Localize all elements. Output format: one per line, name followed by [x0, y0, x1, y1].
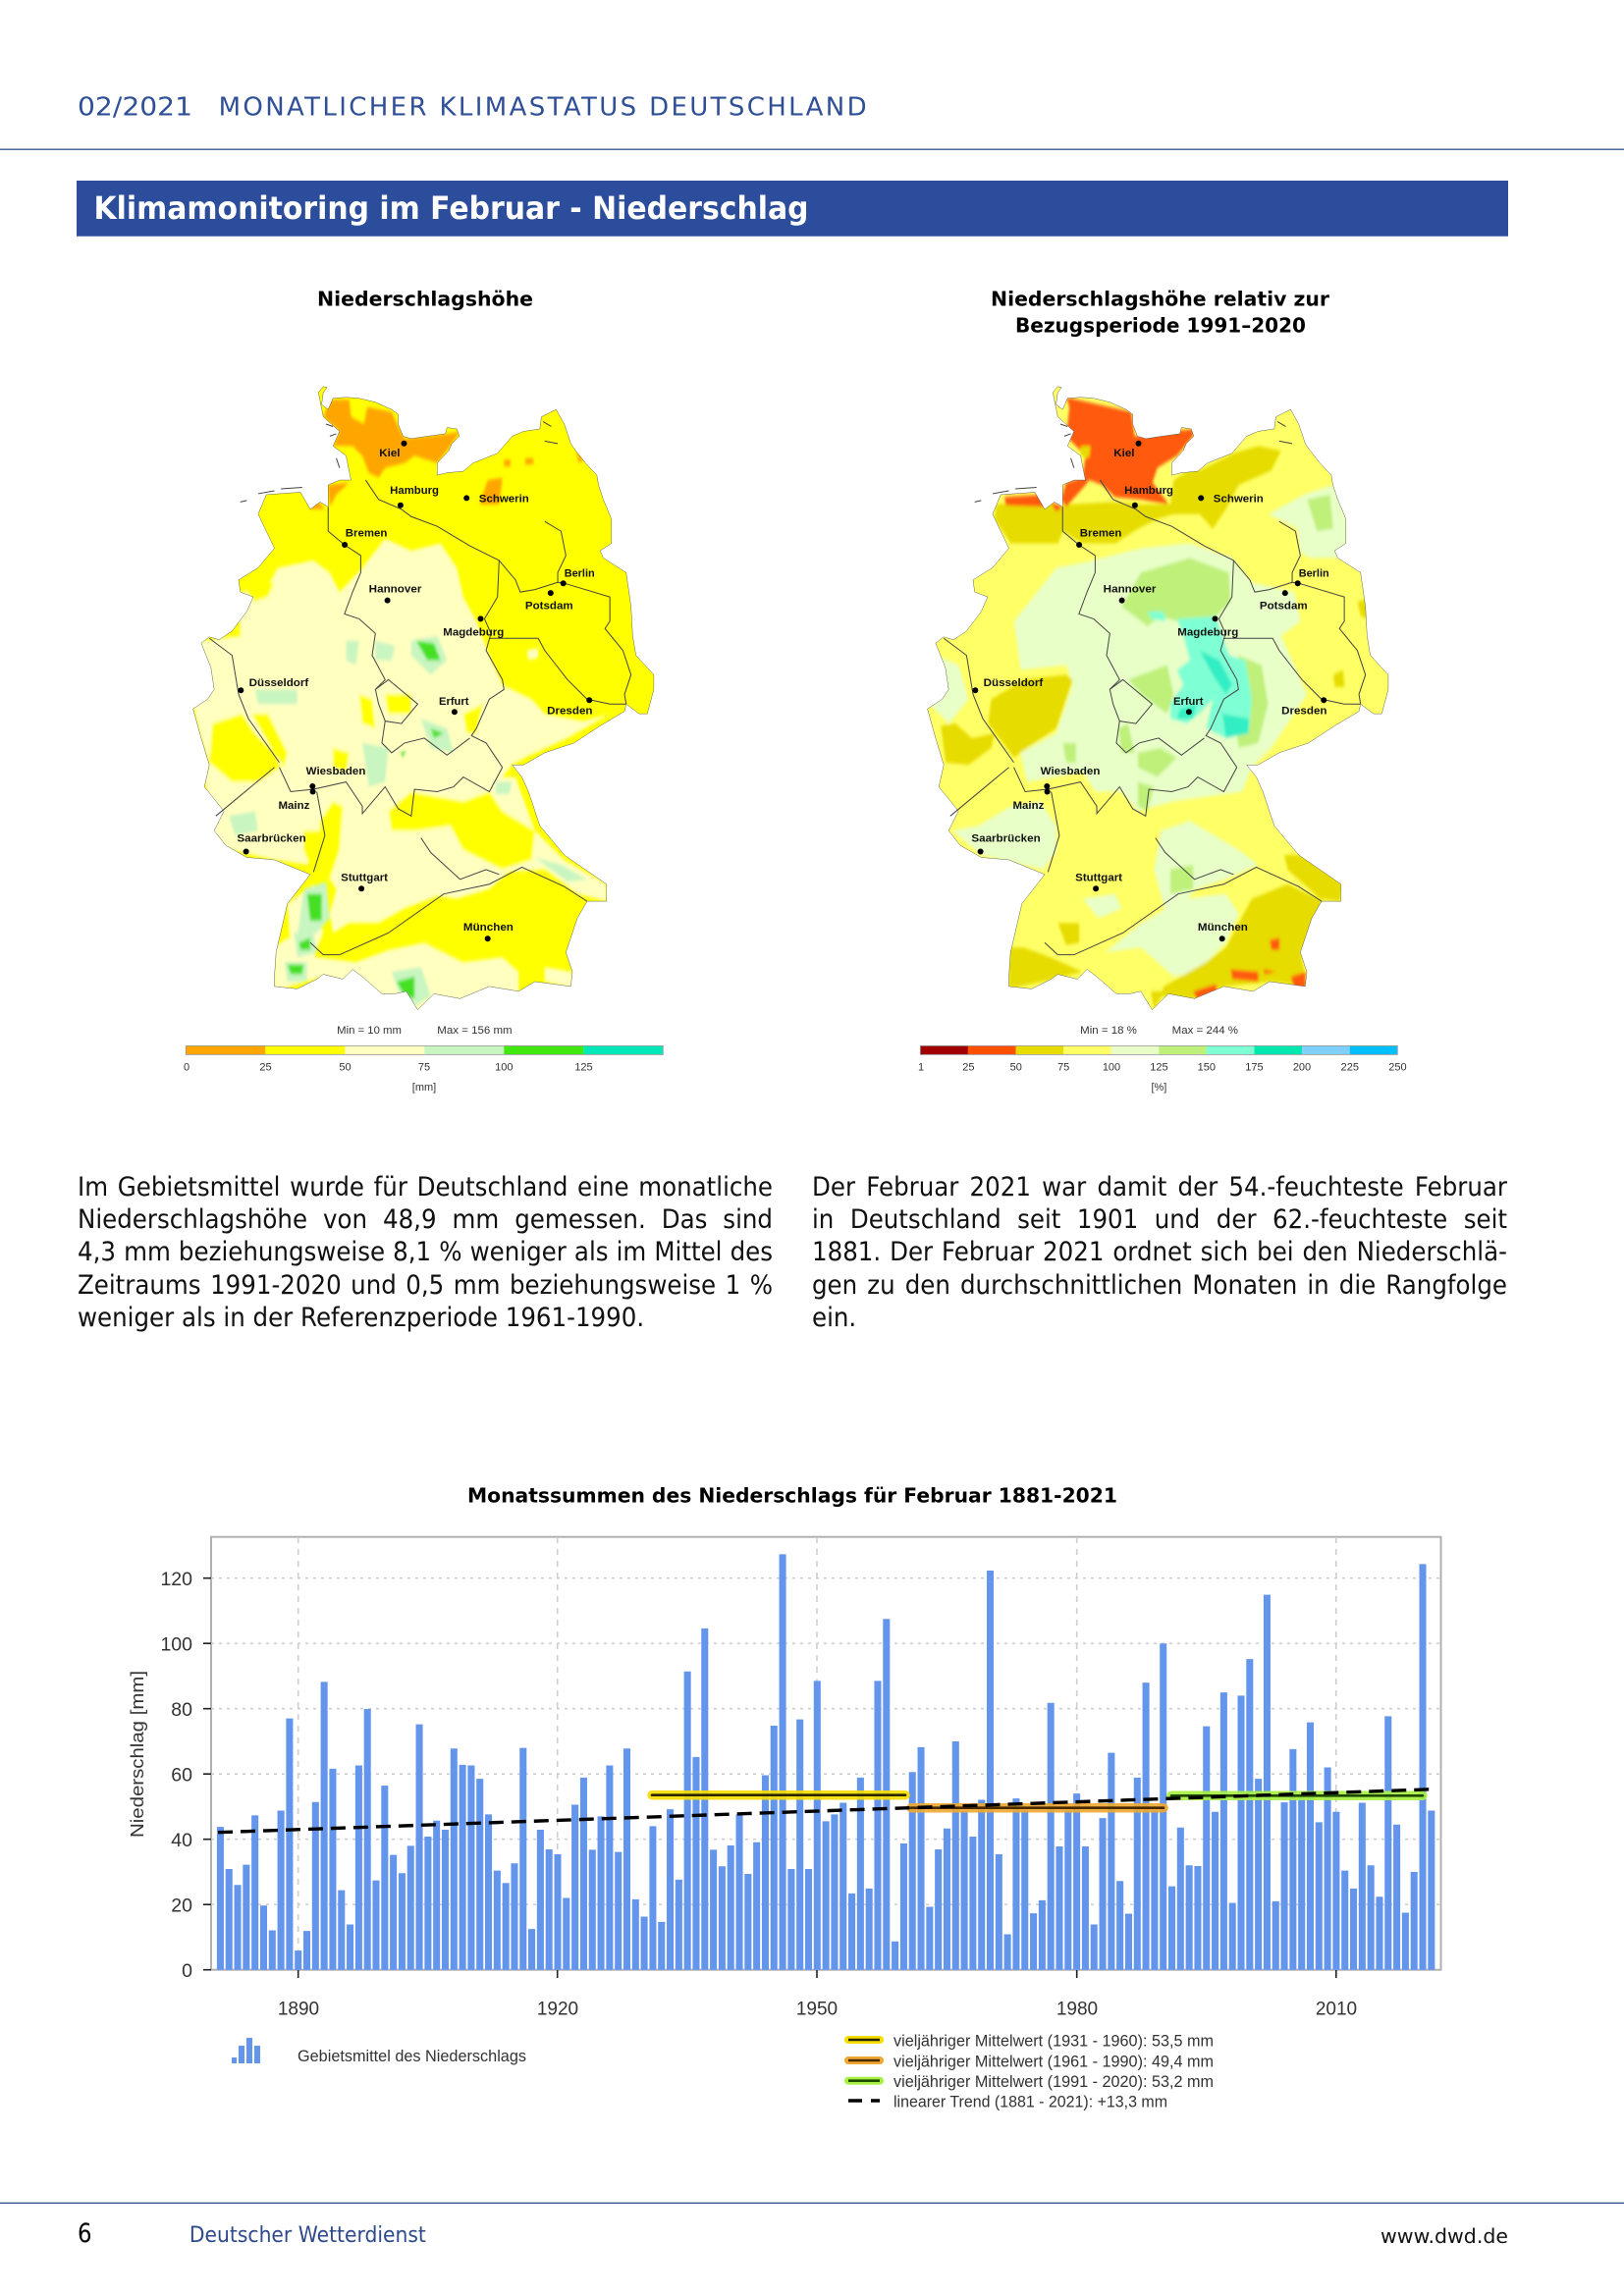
city labels: Saarbrücken	[971, 833, 1041, 845]
city labels: Kiel	[379, 448, 401, 459]
colour legend: percent: 100	[1103, 1062, 1120, 1074]
colour legend: mm: 75	[418, 1062, 430, 1074]
legend: mean lines and trend: vieljähriger Mittelwert (1931 - 1960): 53,5 mm	[893, 2032, 1214, 2050]
y axis: 100	[160, 1633, 192, 1655]
y axis: 0	[182, 1960, 192, 1982]
city labels: Bremen	[1080, 528, 1122, 540]
text block: left column	[78, 1172, 773, 1333]
colour legend: mm: 50	[339, 1062, 352, 1074]
heading: bar chart: Monatssummen des Niederschlags für Februar 1881-2021	[467, 1484, 1117, 1508]
colour legend: percent: [%]	[1151, 1082, 1166, 1094]
legend: area mean bars: Gebietsmittel des Niederschlags	[298, 2048, 526, 2065]
colour legend: percent: 250	[1388, 1062, 1407, 1074]
text block: left column: Niederschlagshöhe von 48,9 mm gemessen. Das sind	[78, 1204, 773, 1235]
legend: mean lines and trend: linearer Trend (1881 - 2021): +13,3 mm	[893, 2093, 1167, 2110]
city labels: Magdeburg	[1177, 626, 1238, 638]
x axis: 1950	[796, 2000, 838, 2020]
city labels: Potsdam	[525, 601, 573, 613]
city labels: Hamburg	[1124, 485, 1173, 497]
y axis: 60	[171, 1765, 192, 1787]
city labels: Erfurt	[1173, 696, 1204, 708]
map: Niederschlagshöhe relativ zur Bezugsperiode	[918, 387, 1407, 1094]
title banner: Klimamonitoring im Februar - Niederschlag	[94, 189, 809, 227]
colour legend: mm	[184, 1025, 663, 1094]
long-term mean 1991-2020	[1171, 1791, 1423, 1800]
city labels: Potsdam	[1260, 601, 1308, 613]
colour legend: mm: Max = 156 mm	[437, 1025, 513, 1037]
city labels: Berlin	[1299, 567, 1329, 579]
city labels: Hannover	[1104, 584, 1157, 596]
map regions: precipitation height	[193, 387, 654, 1011]
colour legend: percent: 200	[1293, 1062, 1311, 1074]
linear trend line	[218, 1789, 1434, 1833]
bar chart: monthly precipitation totals	[127, 1537, 1441, 2110]
city labels: Erfurt	[439, 696, 469, 708]
colour legend: percent	[918, 1025, 1407, 1094]
city labels: Kiel	[1113, 448, 1135, 459]
city labels: Schwerin	[479, 493, 529, 505]
colour legend: mm: 0	[184, 1062, 189, 1074]
legend: mean lines and trend: vieljähriger Mittelwert (1991 - 2020): 53,2 mm	[893, 2073, 1214, 2091]
x axis: 1920	[537, 2000, 578, 2020]
text block: left column: Im Gebietsmittel wurde für Deutschland eine monatliche	[78, 1172, 773, 1202]
city labels: Saarbrücken	[237, 833, 306, 845]
y axis: 20	[171, 1895, 192, 1916]
colour legend: mm: [mm]	[412, 1082, 436, 1094]
x axis: 1890	[278, 2000, 319, 2020]
city labels: Stuttgart	[341, 872, 388, 883]
city labels: Bremen	[346, 528, 388, 540]
city labels: Mainz	[1013, 800, 1045, 812]
precipitation bars 1881-2021	[217, 1554, 1435, 1970]
colour legend: percent: 75	[1057, 1062, 1069, 1074]
text block: right column: Der Februar 2021 war damit der 54.-feuchteste Februar	[812, 1172, 1507, 1202]
map regions: percentage of reference	[928, 387, 1388, 1010]
legend: mean lines and trend: vieljähriger Mittelwert (1961 - 1990): 49,4 mm	[893, 2054, 1214, 2071]
city labels: Düsseldorf	[984, 677, 1044, 689]
x axis	[278, 1970, 1357, 2020]
footer: www.dwd.de	[1380, 2224, 1508, 2248]
header: issue and publication title: MONATLICHER KLIMASTATUS DEUTSCHLAND	[219, 93, 867, 123]
city labels: Wiesbaden	[1041, 766, 1101, 777]
colour legend: percent: 150	[1198, 1062, 1216, 1074]
plot background and grid	[211, 1537, 1441, 1970]
heading: right map: Bezugsperiode 1991–2020	[1015, 314, 1306, 338]
state borders and national outline	[928, 387, 1388, 1010]
y axis: Niederschlag [mm]	[127, 1671, 147, 1838]
text block: right column: 1881. Der Februar 2021 ordnet sich bei den Niederschlä-	[812, 1237, 1507, 1267]
text block: right column: in Deutschland seit 1901 und der 62.-feuchteste seit	[812, 1204, 1507, 1235]
map: Niederschlagshöhe	[184, 387, 663, 1094]
x axis: 1980	[1056, 2000, 1098, 2020]
city labels: Berlin	[565, 567, 595, 579]
legend: area mean bars	[232, 2038, 526, 2065]
city labels: Mainz	[279, 800, 310, 812]
city labels: Dresden	[547, 706, 593, 718]
text block: left column: 4,3 mm beziehungsweise 8,1 % weniger als im Mittel des	[78, 1237, 773, 1267]
colour legend: percent: Min = 18 %	[1080, 1025, 1137, 1037]
city labels: München	[1198, 922, 1248, 934]
colour legend: percent: 1	[918, 1062, 924, 1074]
y axis: 120	[160, 1569, 192, 1590]
heading: right map: Niederschlagshöhe relativ zur	[991, 288, 1329, 311]
city labels: Dresden	[1281, 706, 1327, 718]
footer: Deutscher Wetterdienst	[189, 2223, 426, 2248]
text block: right column	[812, 1172, 1507, 1333]
footer: 6	[78, 2218, 92, 2249]
colour legend: percent: Max = 244 %	[1172, 1025, 1238, 1037]
colour legend: percent: 175	[1245, 1062, 1264, 1074]
colour legend: percent: 25	[962, 1062, 975, 1074]
heading: right map	[991, 288, 1329, 338]
legend: mean lines and trend	[848, 2032, 1214, 2110]
city labels: Hamburg	[390, 485, 439, 497]
long-term mean 1931-1960	[652, 1790, 905, 1799]
header: issue and publication title: 02/2021	[78, 93, 192, 123]
text block: left column: weniger als in der Referenzperiode 1961-1990.	[78, 1303, 644, 1333]
long-term mean 1961-1990	[911, 1803, 1164, 1812]
colour legend: mm: 25	[259, 1062, 272, 1074]
city labels: Hannover	[369, 584, 422, 596]
city labels: Stuttgart	[1075, 872, 1122, 883]
title banner	[77, 181, 1508, 237]
colour legend: mm: Min = 10 mm	[337, 1025, 402, 1037]
text block: right column: ein.	[812, 1303, 856, 1333]
y axis: 40	[171, 1830, 192, 1851]
colour legend: mm: 100	[495, 1062, 513, 1074]
text block: right column: gen zu den durchschnittlichen Monaten in die Rangfolge	[812, 1270, 1507, 1301]
heading: left map: Niederschlagshöhe	[317, 288, 533, 311]
y axis: 80	[171, 1699, 192, 1721]
text block: left column: Zeitraums 1991-2020 und 0,5 mm beziehungsweise 1 %	[78, 1270, 773, 1301]
city labels: Schwerin	[1214, 493, 1264, 505]
footer	[0, 2203, 1624, 2249]
colour legend: mm: 125	[574, 1062, 593, 1074]
city labels	[237, 441, 595, 941]
city labels: Wiesbaden	[306, 766, 366, 777]
city labels	[971, 441, 1329, 941]
colour legend: percent: 225	[1341, 1062, 1359, 1074]
city labels: München	[463, 922, 514, 934]
colour legend: percent: 125	[1150, 1062, 1168, 1074]
state borders and national outline	[193, 387, 654, 1010]
city labels: Magdeburg	[443, 626, 504, 638]
colour legend: percent: 50	[1010, 1062, 1022, 1074]
city labels: Düsseldorf	[249, 677, 309, 689]
x axis: 2010	[1316, 2000, 1357, 2020]
y axis	[127, 1569, 211, 1982]
